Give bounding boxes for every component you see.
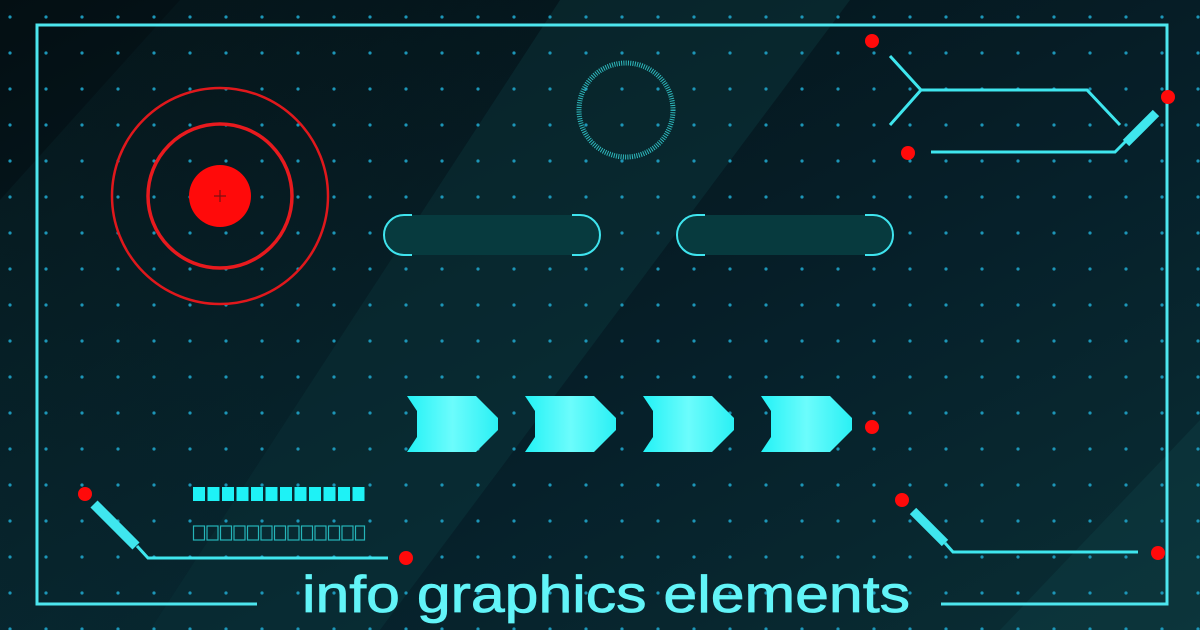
- bottom-left circuit: [78, 487, 413, 565]
- arrows: chevrons: [407, 396, 879, 452]
- pill 1: [384, 215, 600, 255]
- bottom-right circuit: [895, 493, 1165, 560]
- dashed circle: [579, 63, 673, 157]
- pill 2: [677, 215, 893, 255]
- title: info graphics elements: [302, 566, 910, 624]
- top-right circuit: [865, 34, 1175, 160]
- target: red rings: [112, 88, 328, 304]
- progress bars: [193, 487, 364, 540]
